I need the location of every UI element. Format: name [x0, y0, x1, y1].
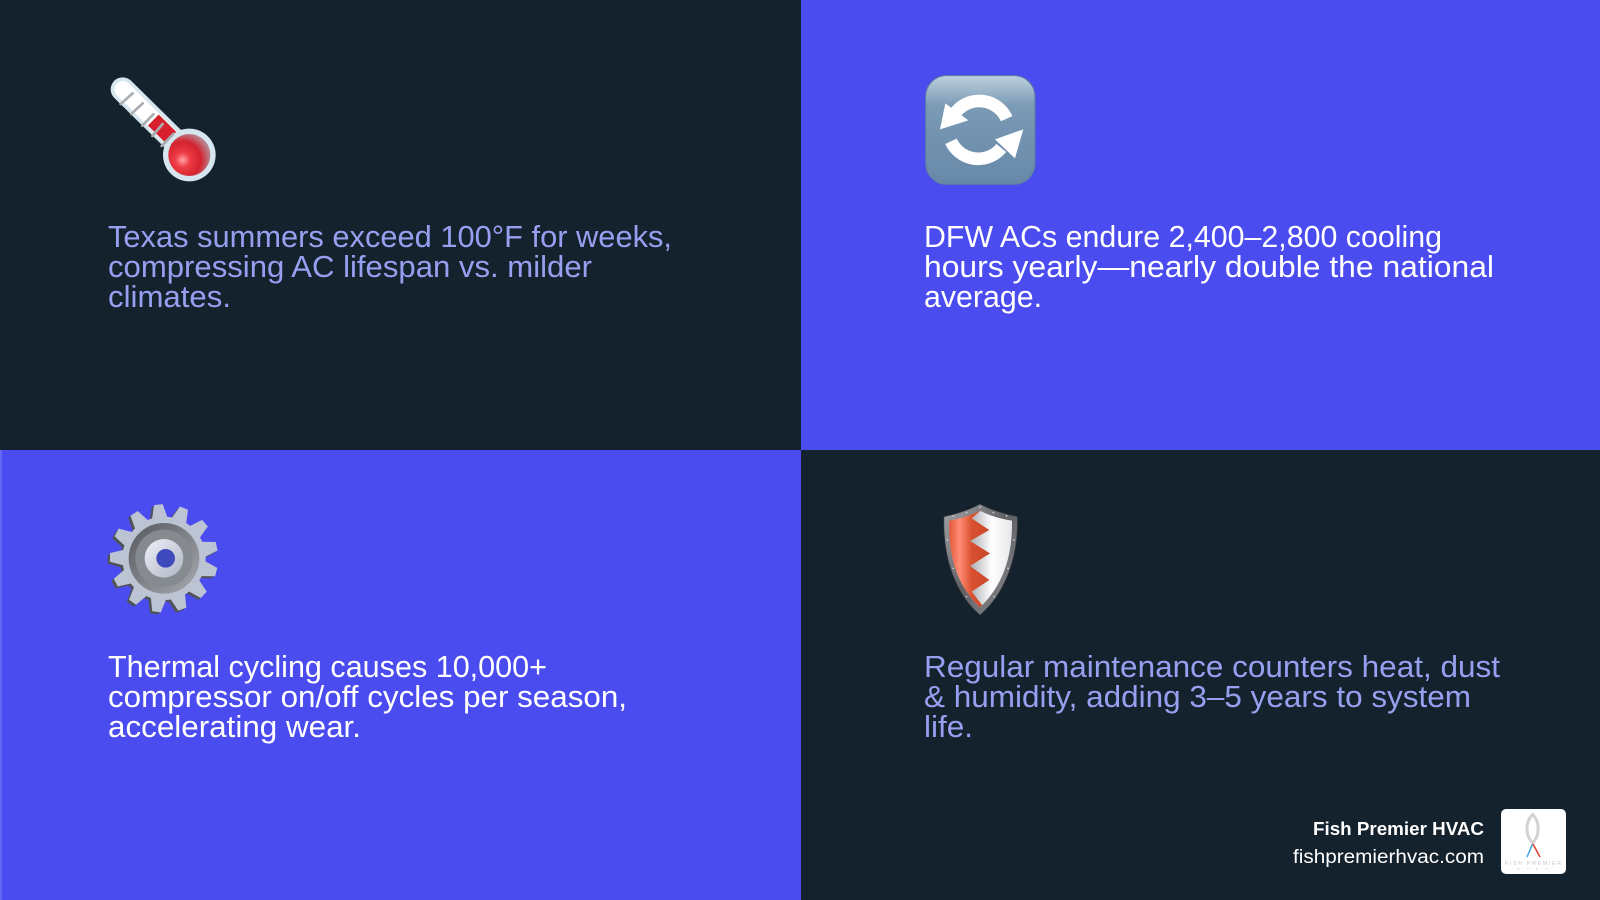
text: maintenance statement: life.	[924, 709, 973, 744]
text: thermal cycling statement: accelerating wear.	[108, 709, 361, 744]
panel: maintenance	[925, 504, 1500, 738]
left edge strip	[0, 450, 2, 900]
text: cooling hours statement: average.	[924, 279, 1042, 314]
logo: FISH PREMIER	[1505, 861, 1561, 867]
footer: brand block	[1293, 809, 1566, 874]
icon: refresh arrows	[926, 76, 1035, 184]
text: heat statement: compressing AC lifespan vs. milder	[108, 249, 592, 284]
text: thermal cycling statement	[108, 649, 627, 744]
text: thermal cycling statement: compressor on/off cycles per season,	[108, 679, 627, 714]
logo: H·V·A·C	[1517, 867, 1548, 871]
text: cooling hours statement: hours yearly—nearly double the national	[924, 249, 1494, 284]
icon: gear	[108, 504, 218, 615]
icon: thermometer	[121, 89, 216, 181]
panel: thermal cycling	[0, 450, 801, 900]
text: maintenance statement	[924, 649, 1500, 744]
brand website: fishpremierhvac.com	[1293, 847, 1484, 868]
icon: shield	[944, 504, 1017, 615]
text: heat statement: climates.	[108, 279, 231, 314]
panel: extreme heat	[0, 0, 801, 450]
text: maintenance statement: & humidity, adding 3–5 years to system	[924, 679, 1471, 714]
text: cooling hours statement	[924, 219, 1494, 314]
logo	[1501, 809, 1566, 874]
text: thermal cycling statement: Thermal cycling causes 10,000+	[108, 649, 547, 684]
text: cooling hours statement: DFW ACs endure 2,400–2,800 cooling	[924, 219, 1442, 254]
text: heat statement	[108, 219, 672, 314]
brand name: Fish Premier HVAC	[1313, 819, 1484, 839]
text: maintenance statement: Regular maintenance counters heat, dust	[924, 649, 1500, 684]
text: heat statement: Texas summers exceed 100°F for weeks,	[108, 219, 672, 254]
panel: cooling hours	[801, 0, 1600, 450]
